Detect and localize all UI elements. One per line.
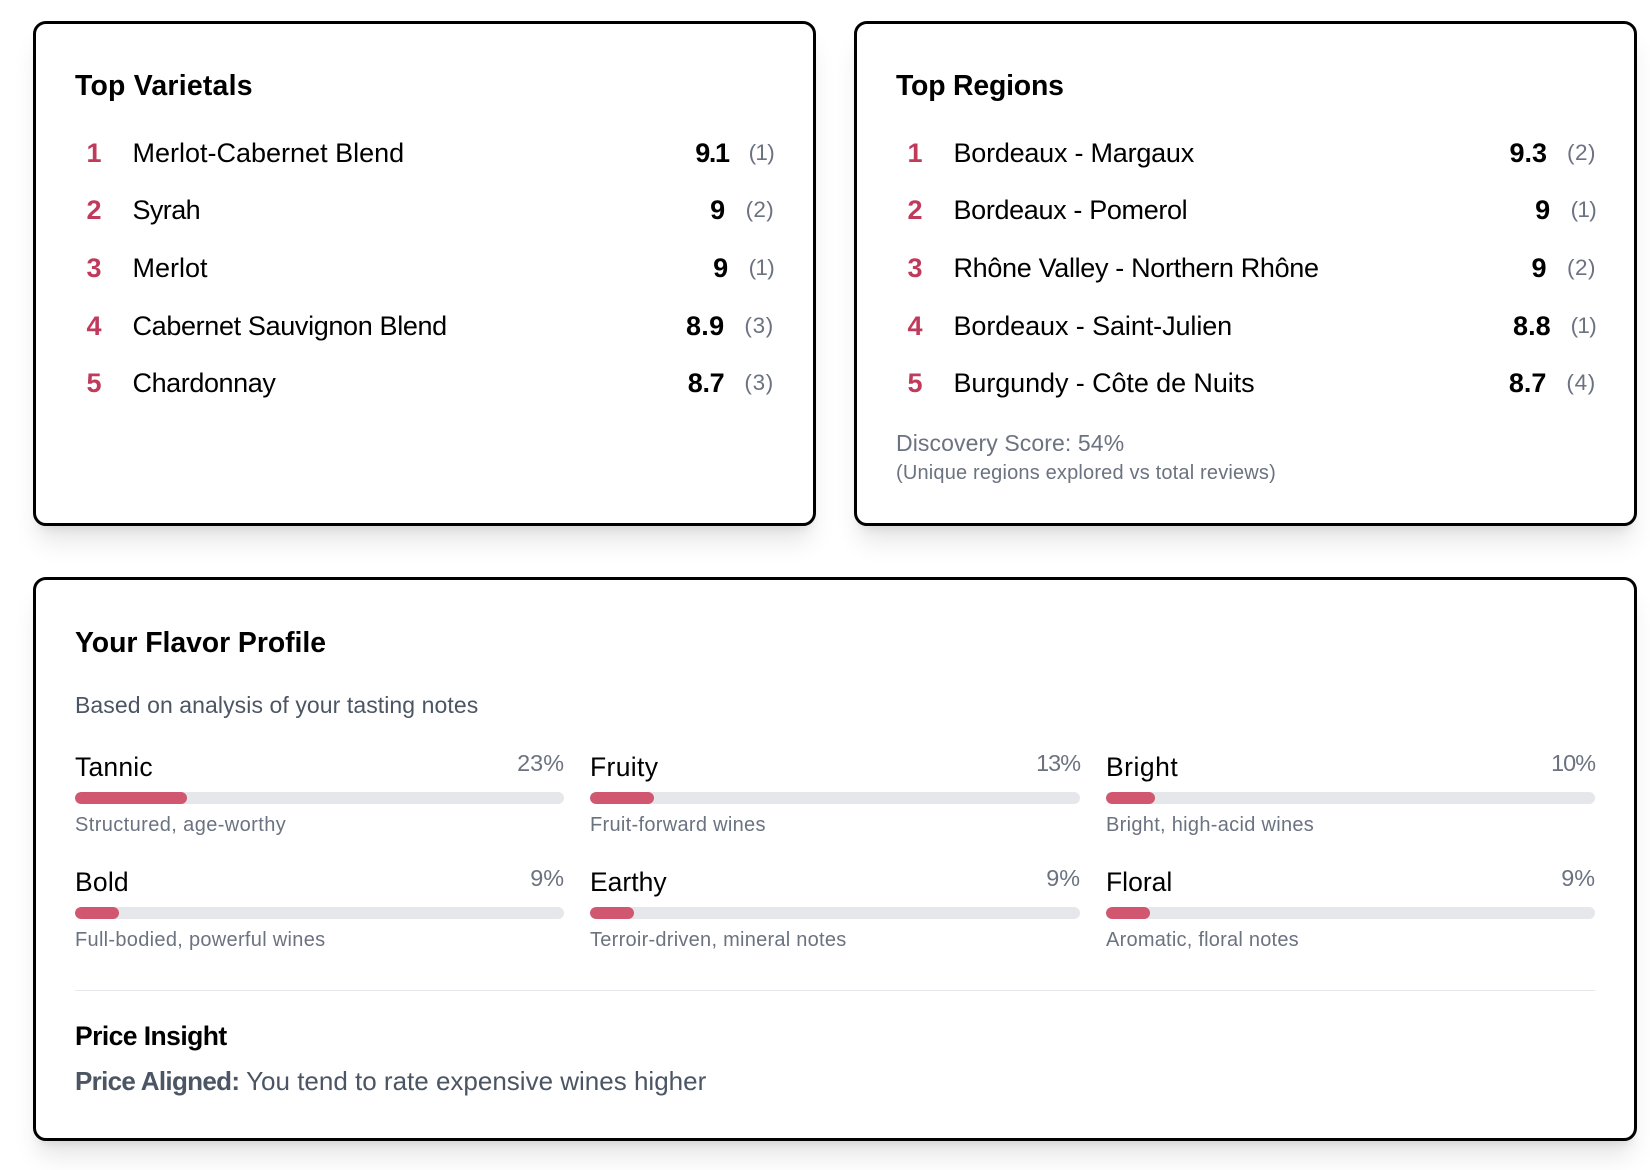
list row: Syrah: (2) xyxy=(746,197,774,222)
list row: Bordeaux - Margaux xyxy=(907,138,1596,168)
list row: Bordeaux - Saint-Julien xyxy=(907,311,1596,341)
list row: Burgundy - Côte de Nuits xyxy=(907,368,1596,398)
flavor: Bright: 10% xyxy=(1551,750,1595,776)
list row: Bordeaux - Pomerol: 9 xyxy=(1535,195,1551,225)
list row: Syrah: 2 xyxy=(86,195,102,225)
list row: Bordeaux - Margaux: Bordeaux - Margaux xyxy=(954,138,1194,168)
list row: Rhône Valley - Northern Rhône: (2) xyxy=(1567,255,1596,280)
list row: Bordeaux - Pomerol xyxy=(907,195,1596,225)
flavor: Bold: Bold xyxy=(75,867,129,897)
list row: Cabernet Sauvignon Blend: Cabernet Sauvignon Blend xyxy=(132,311,447,341)
list row: Merlot-Cabernet Blend: 9.1 xyxy=(695,138,729,168)
list row: Merlot: 9 xyxy=(713,253,729,283)
heading: top varietals: Top Varietals xyxy=(75,70,253,102)
discovery score: Discovery Score: 54% xyxy=(896,430,1124,456)
list row: Bordeaux - Pomerol: (1) xyxy=(1571,197,1596,222)
list row: Bordeaux - Pomerol: Bordeaux - Pomerol xyxy=(954,195,1187,225)
list row: Merlot: Merlot xyxy=(132,253,208,283)
list row: Bordeaux - Saint-Julien: Bordeaux - Saint-Julien xyxy=(954,311,1232,341)
list row: Chardonnay: 8.7 xyxy=(688,368,724,398)
list row: Burgundy - Côte de Nuits: 5 xyxy=(907,368,923,398)
list row: Rhône Valley - Northern Rhône: Rhône Valley - Northern Rhône xyxy=(954,253,1319,283)
discovery score note: (Unique regions explored vs total reviews) xyxy=(896,462,1276,484)
list row: Cabernet Sauvignon Blend xyxy=(86,311,774,341)
list row: Chardonnay xyxy=(86,368,774,398)
list row: Bordeaux - Margaux: (2) xyxy=(1567,140,1596,165)
list row: Syrah xyxy=(86,195,774,225)
flavor: Tannic: 23% xyxy=(517,750,564,776)
flavor: Floral xyxy=(1106,865,1595,951)
list row: Merlot xyxy=(86,253,774,283)
flavor: Fruity: Fruit-forward wines xyxy=(590,814,766,836)
flavor: Bold: 9% xyxy=(530,865,564,891)
list row: Chardonnay: Chardonnay xyxy=(132,368,275,398)
flavor: Earthy: 9% xyxy=(1046,865,1080,891)
list row: Rhône Valley - Northern Rhône: 3 xyxy=(907,253,923,283)
list row: Syrah: 9 xyxy=(710,195,726,225)
flavor: Floral: Aromatic, floral notes xyxy=(1106,929,1299,951)
list row: Bordeaux - Pomerol: 2 xyxy=(907,195,923,225)
flavor: Tannic: Structured, age-worthy xyxy=(75,814,286,836)
flavor: Fruity: Fruity xyxy=(590,752,658,782)
list row: Bordeaux - Saint-Julien: 8.8 xyxy=(1513,311,1551,341)
flavor: Tannic: Tannic xyxy=(75,752,153,782)
panel: top varietals xyxy=(33,21,816,526)
flavor: Bright xyxy=(1106,750,1596,836)
flavor: Fruity: 13% xyxy=(1036,750,1080,776)
flavor: Bright: Bright xyxy=(1106,752,1178,782)
list row: Cabernet Sauvignon Blend: 8.9 xyxy=(686,311,724,341)
heading: top regions: Top Regions xyxy=(896,70,1064,102)
flavor: Floral: 9% xyxy=(1561,865,1595,891)
flavor profile subtitle: Based on analysis of your tasting notes xyxy=(75,692,478,718)
flavor: Bright: Bright, high-acid wines xyxy=(1106,814,1314,836)
list row: Chardonnay: (3) xyxy=(744,370,774,395)
list row: Merlot-Cabernet Blend xyxy=(86,138,774,168)
flavor: Earthy: Earthy xyxy=(590,867,667,897)
list row: Rhône Valley - Northern Rhône: 9 xyxy=(1531,253,1547,283)
list row: Burgundy - Côte de Nuits: 8.7 xyxy=(1509,368,1546,398)
flavor: Bold: Full-bodied, powerful wines xyxy=(75,929,325,951)
list row: Rhône Valley - Northern Rhône xyxy=(907,253,1596,283)
flavor: Earthy: Terroir-driven, mineral notes xyxy=(590,929,847,951)
list row: Syrah: Syrah xyxy=(132,195,200,225)
panel: flavor profile xyxy=(33,577,1637,1141)
panel: top regions xyxy=(854,21,1637,526)
list row: Chardonnay: 5 xyxy=(86,368,102,398)
list row: Cabernet Sauvignon Blend: 4 xyxy=(86,311,102,341)
list row: Burgundy - Côte de Nuits: Burgundy - Côte de Nuits xyxy=(954,368,1254,398)
list row: Merlot-Cabernet Blend: 1 xyxy=(86,138,102,168)
list row: Merlot: (1) xyxy=(749,255,774,280)
list row: Bordeaux - Margaux: 1 xyxy=(907,138,923,168)
flavor: Floral: Floral xyxy=(1106,867,1172,897)
list row: Bordeaux - Margaux: 9.3 xyxy=(1509,138,1547,168)
flavor: Fruity xyxy=(590,750,1080,836)
price insight text: Price Aligned: You tend to rate expensive wines higher xyxy=(75,1066,706,1096)
list row: Burgundy - Côte de Nuits: (4) xyxy=(1566,370,1596,395)
list row: Bordeaux - Saint-Julien: 4 xyxy=(907,311,923,341)
heading: price insight: Price Insight xyxy=(75,1021,227,1051)
list row: Cabernet Sauvignon Blend: (3) xyxy=(744,313,774,338)
flavor: Earthy xyxy=(590,865,1080,951)
list row: Merlot-Cabernet Blend: (1) xyxy=(749,140,774,165)
flavor: Bold xyxy=(75,865,564,951)
heading: your flavor profile: Your Flavor Profile xyxy=(75,626,326,658)
flavor: Tannic xyxy=(75,750,564,836)
list row: Bordeaux - Saint-Julien: (1) xyxy=(1571,313,1596,338)
list row: Merlot: 3 xyxy=(86,253,102,283)
list row: Merlot-Cabernet Blend: Merlot-Cabernet Blend xyxy=(132,138,404,168)
